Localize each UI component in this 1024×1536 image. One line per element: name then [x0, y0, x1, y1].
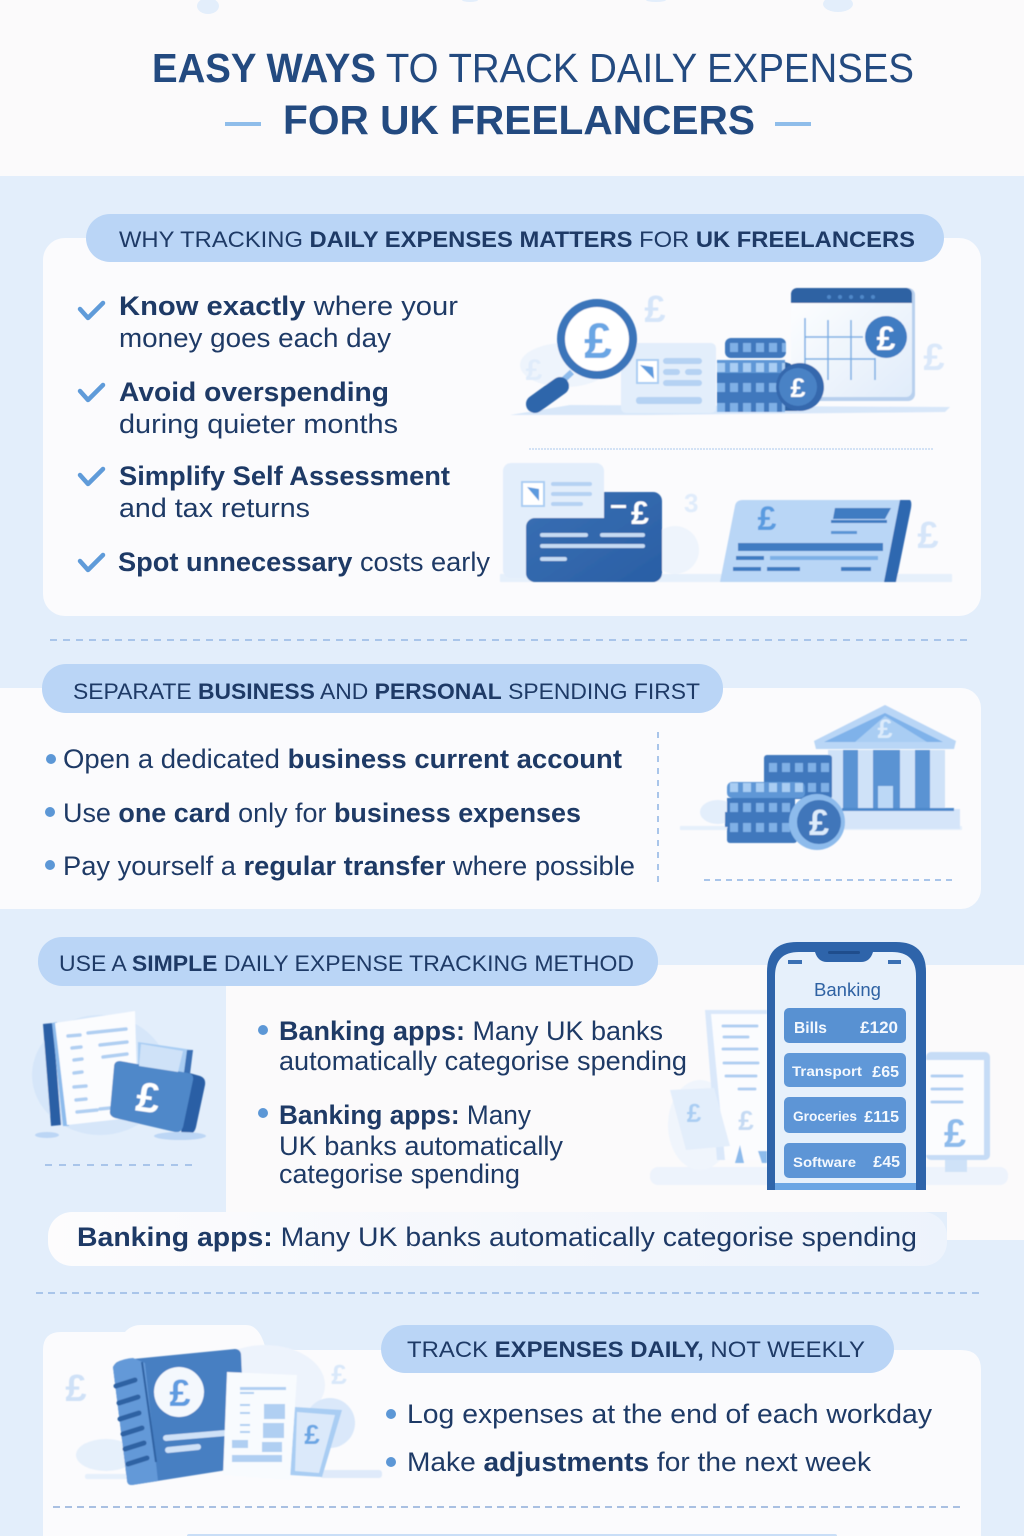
divider	[50, 639, 972, 641]
bullet list: banking apps	[258, 1016, 687, 1189]
heading pill: separate spending: SEPARATE BUSINESS AND PERSONAL SPENDING FIRST	[73, 679, 700, 704]
panel: separate business and personal	[0, 664, 981, 909]
bullet list: track daily: Log expenses at the end of each workday	[407, 1399, 933, 1429]
checklist: Spot unnecessary costs early	[118, 547, 491, 577]
illustration: magnifier, document, coins and calendar: £	[526, 354, 543, 387]
checklist	[80, 291, 491, 577]
illustration: bank and coins: £	[809, 802, 829, 843]
illustration: notebook, receipt and note	[65, 1345, 382, 1485]
bullet list: banking apps: automatically categorise spending	[279, 1046, 687, 1076]
checklist: Simplify Self Assessment	[119, 461, 450, 491]
illustration: magnifier, document, coins and calendar: £	[584, 313, 612, 369]
illustration: receipts behind phone: £	[687, 1098, 702, 1128]
illustration: bank card and payslip: 3	[684, 488, 698, 518]
illustration: phone with banking app	[767, 942, 926, 1190]
illustration: bank and coins: £	[877, 714, 893, 744]
illustration: magnifier, document, coins and calendar: £	[877, 320, 896, 358]
next heading pill, cropped	[187, 1534, 837, 1536]
illustration: notebook, receipt and note: £	[169, 1373, 191, 1415]
checklist: during quieter months	[119, 409, 398, 439]
heading pill: why tracking matters: WHY TRACKING DAILY EXPENSES MATTERS FOR UK FREELANCERS	[119, 227, 915, 252]
checklist: money goes each day	[119, 323, 392, 353]
panel: simple tracking method	[32, 937, 1024, 1266]
bullet list: track daily: Make adjustments for the next week	[407, 1447, 872, 1477]
illustration: bank card and payslip: £	[758, 500, 777, 538]
heading pill: simple method: USE A SIMPLE DAILY EXPENSE TRACKING METHOD	[59, 951, 634, 976]
illustration: receipts behind phone: £	[944, 1112, 966, 1156]
illustration: phone with banking app: Banking	[814, 980, 881, 1000]
app row: transport: Transport	[792, 1063, 862, 1079]
app row: groceries	[784, 1097, 906, 1133]
checklist: Avoid overspending	[119, 377, 389, 407]
app row: bills: £120	[860, 1018, 898, 1037]
divider dotted	[529, 448, 934, 450]
bullet list: banking apps: Banking apps: Many UK banks	[279, 1016, 663, 1046]
heading pill: simple method	[38, 937, 658, 986]
illustration: receipt and wallet	[32, 1011, 206, 1140]
app row: software: Software	[793, 1154, 856, 1170]
bullet list: banking apps: UK banks automatically	[279, 1131, 564, 1161]
bullet list: separate spending: Open a dedicated business current account	[63, 744, 622, 774]
app row: software: £45	[873, 1154, 900, 1171]
app row: transport	[784, 1053, 906, 1087]
panel: why tracking matters	[43, 214, 981, 616]
illustration: magnifier, document, coins and calendar: £	[923, 337, 945, 379]
illustration: bank card and payslip: £	[917, 515, 939, 557]
header decoration	[197, 0, 853, 14]
illustration: receipts behind phone: £	[738, 1105, 754, 1136]
illustration: bank and coins	[680, 705, 962, 850]
app row: transport: £65	[872, 1064, 899, 1081]
illustration: notebook, receipt and note: £	[331, 1359, 347, 1390]
title: EASY WAYS TO TRACK DAILY EXPENSES	[152, 45, 914, 91]
divider	[36, 1292, 982, 1294]
callout: banking apps	[48, 1212, 947, 1266]
illustration: magnifier, document, coins and calendar	[510, 288, 950, 415]
bullet list: banking apps: Banking apps: Many	[279, 1100, 532, 1130]
bullet list: separate spending	[45, 744, 635, 881]
illustration: notebook, receipt and note: £	[304, 1419, 320, 1450]
illustration: bank card and payslip	[500, 463, 952, 582]
heading pill: why tracking matters	[86, 214, 944, 262]
checklist: Know exactly where your	[119, 291, 458, 321]
illustration: notebook, receipt and note: £	[65, 1368, 87, 1410]
app row: bills: Bills	[794, 1020, 827, 1037]
heading pill: separate spending	[42, 664, 723, 713]
illustration: bank card and payslip: £	[631, 495, 649, 531]
title	[152, 45, 914, 143]
bullet list: track daily	[386, 1399, 933, 1477]
bullet list: banking apps: categorise spending	[279, 1159, 520, 1189]
illustration: magnifier, document, coins and calendar: £	[644, 289, 666, 331]
illustration: receipts behind phone	[650, 1010, 1008, 1185]
bullet list: separate spending: Pay yourself a regular transfer where possible	[63, 851, 635, 881]
app row: software	[784, 1143, 906, 1178]
panel: track expenses daily	[43, 1325, 981, 1536]
heading pill: track daily	[381, 1325, 894, 1373]
title: FOR UK FREELANCERS	[283, 97, 755, 143]
app row: groceries: £115	[864, 1109, 899, 1126]
illustration: receipt and wallet: £	[133, 1073, 163, 1122]
callout: banking apps: Banking apps: Many UK banks automatically categorise spending	[77, 1222, 917, 1252]
bullet list: separate spending: Use one card only for business expenses	[63, 798, 581, 828]
app row: bills	[784, 1008, 906, 1043]
heading pill: track daily: TRACK EXPENSES DAILY, NOT WEEKLY	[407, 1337, 865, 1362]
illustration: magnifier, document, coins and calendar: £	[790, 373, 806, 403]
checklist: and tax returns	[119, 493, 310, 523]
app row: groceries: Groceries	[793, 1108, 857, 1124]
